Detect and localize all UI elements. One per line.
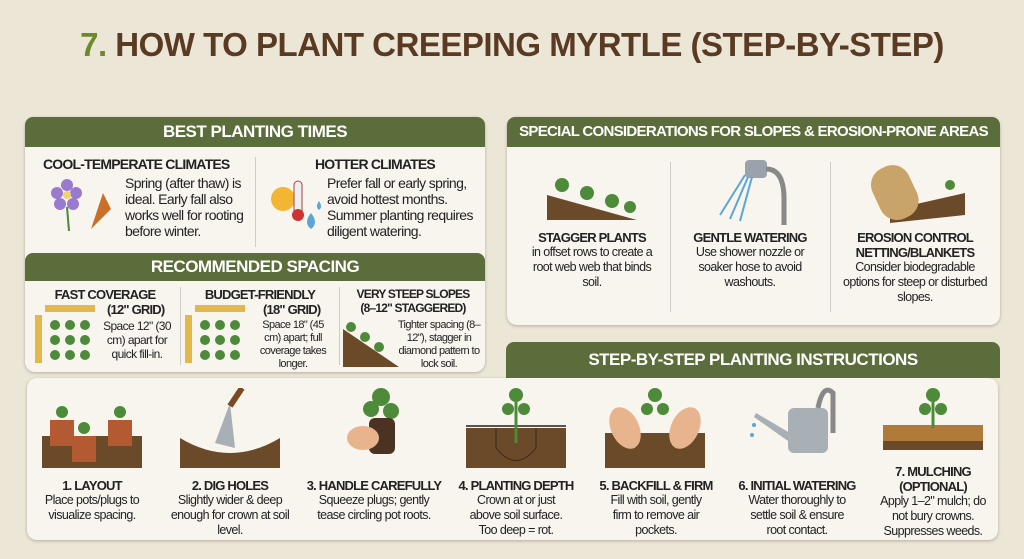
panel: best planting times & spacing: Prefer fall or early spring, avoid hottest months. Summer planting requires diligent watering. bbox=[327, 175, 473, 239]
step 1 bbox=[42, 406, 142, 522]
heading: step-by-step: STEP-BY-STEP PLANTING INSTRUCTIONS bbox=[588, 350, 918, 369]
icon: trowel bbox=[180, 388, 280, 468]
step 3: Squeeze plugs; gently tease circling pot roots. bbox=[317, 493, 431, 522]
icon: planting depth bbox=[466, 388, 566, 468]
step 7 bbox=[880, 388, 986, 538]
panel: slopes bbox=[507, 117, 1000, 325]
item: stagger plants: in offset rows to create a root web web that binds soil. bbox=[532, 245, 652, 289]
step 7: 7. MULCHING bbox=[895, 464, 971, 479]
text block: fast coverage: FAST COVERAGE bbox=[55, 287, 155, 302]
icon: slope with plants bbox=[547, 178, 637, 220]
step 5 bbox=[599, 388, 713, 537]
icon: rolled blanket bbox=[870, 165, 965, 223]
text block: cool-temperate: COOL-TEMPERATE CLIMATES bbox=[43, 156, 229, 172]
text block: hotter climates: HOTTER CLIMATES bbox=[315, 156, 435, 172]
heading: step-by-step bbox=[506, 342, 1000, 378]
icon: mulch bbox=[883, 388, 983, 450]
item: gentle watering bbox=[693, 160, 807, 289]
panel: best planting times & spacing bbox=[25, 117, 485, 372]
text block: budget-friendly: BUDGET-FRIENDLY bbox=[205, 287, 315, 302]
item: erosion control: NETTING/BLANKETS bbox=[856, 245, 974, 260]
icon: sun thermometer drops bbox=[271, 180, 321, 229]
item: erosion control: EROSION CONTROL bbox=[857, 230, 973, 245]
item: erosion control bbox=[843, 165, 987, 304]
panel: step-by-step bbox=[27, 378, 998, 540]
step 3 bbox=[307, 388, 442, 522]
panel: best planting times & spacing: Space 12" (30 cm) apart for quick fill-in. bbox=[103, 319, 171, 361]
step 4 bbox=[458, 388, 574, 537]
icon: slope bbox=[343, 322, 399, 367]
heading: best planting times: BEST PLANTING TIMES bbox=[163, 122, 347, 141]
step 7: Apply 1–2" mulch; do not bury crowns. Suppresses weeds. bbox=[880, 494, 986, 538]
heading: recommended spacing bbox=[25, 253, 485, 281]
heading: slopes bbox=[507, 117, 1000, 147]
step 4: Crown at or just above soil surface. Too deep = rot. bbox=[470, 493, 562, 537]
icon: hands backfill bbox=[605, 388, 705, 468]
step 6: Water thoroughly to settle soil & ensure root contact. bbox=[748, 493, 846, 537]
icon: flower and leaf bbox=[51, 179, 111, 231]
text block: budget-friendly: (18" GRID) bbox=[263, 302, 320, 317]
item: gentle watering: GENTLE WATERING bbox=[693, 230, 807, 245]
icon: shower nozzle bbox=[719, 160, 786, 225]
text block: budget-friendly bbox=[185, 287, 326, 370]
heading: slopes: SPECIAL CONSIDERATIONS FOR SLOPES & EROSION-PRONE AREAS bbox=[519, 123, 988, 140]
text block: very steep slopes: VERY STEEP SLOPES bbox=[357, 287, 469, 301]
heading: recommended spacing: RECOMMENDED SPACING bbox=[151, 257, 359, 276]
step 1: Place pots/plugs to visualize spacing. bbox=[45, 493, 139, 522]
icon: pots bbox=[42, 406, 142, 468]
item: stagger plants: STAGGER PLANTS bbox=[538, 230, 646, 245]
step 6: 6. INITIAL WATERING bbox=[738, 478, 856, 493]
icon: hand with plug bbox=[347, 388, 399, 454]
step 2: 2. DIG HOLES bbox=[192, 478, 268, 493]
step 5: 5. BACKFILL & FIRM bbox=[599, 478, 713, 493]
step 2: Slightly wider & deep enough for crown at soil level. bbox=[171, 493, 289, 537]
item: erosion control: Consider biodegradable options for steep or disturbed slopes. bbox=[843, 260, 987, 304]
text block: cool-temperate bbox=[43, 156, 243, 239]
panel: best planting times & spacing: Spring (after thaw) is ideal. Early fall also works well for rooting before winter. bbox=[125, 175, 243, 239]
panel: best planting times & spacing: Tighter spacing (8–12"), stagger in diamond pattern to lock soil. bbox=[398, 319, 480, 370]
step 1: 1. LAYOUT bbox=[62, 478, 122, 493]
heading: best planting times bbox=[25, 117, 485, 147]
title: 7. HOW TO PLANT CREEPING MYRTLE (STEP-BY-STEP) bbox=[80, 26, 944, 63]
step 6 bbox=[738, 388, 856, 537]
text block: hotter climates bbox=[271, 156, 473, 239]
item: stagger plants bbox=[532, 178, 653, 289]
text block: very steep slopes: (8–12" STAGGERED) bbox=[360, 301, 466, 315]
icon: ruler grid bbox=[35, 305, 95, 363]
icon: watering can bbox=[750, 388, 836, 453]
panel: best planting times & spacing: Space 18" (45 cm) apart; full coverage takes longer. bbox=[260, 319, 326, 370]
step 4: 4. PLANTING DEPTH bbox=[459, 478, 573, 493]
text block: fast coverage bbox=[35, 287, 172, 363]
step 5: Fill with soil, gently firm to remove air pockets. bbox=[610, 493, 702, 537]
text block: fast coverage: (12" GRID) bbox=[107, 302, 164, 317]
step 2 bbox=[171, 388, 289, 537]
item: gentle watering: Use shower nozzle or soaker hose to avoid washouts. bbox=[696, 245, 804, 289]
step 3: 3. HANDLE CAREFULLY bbox=[307, 478, 441, 493]
text block: very steep slopes bbox=[343, 287, 481, 370]
step 7: (OPTIONAL) bbox=[899, 479, 967, 494]
icon: ruler grid bbox=[185, 305, 245, 363]
